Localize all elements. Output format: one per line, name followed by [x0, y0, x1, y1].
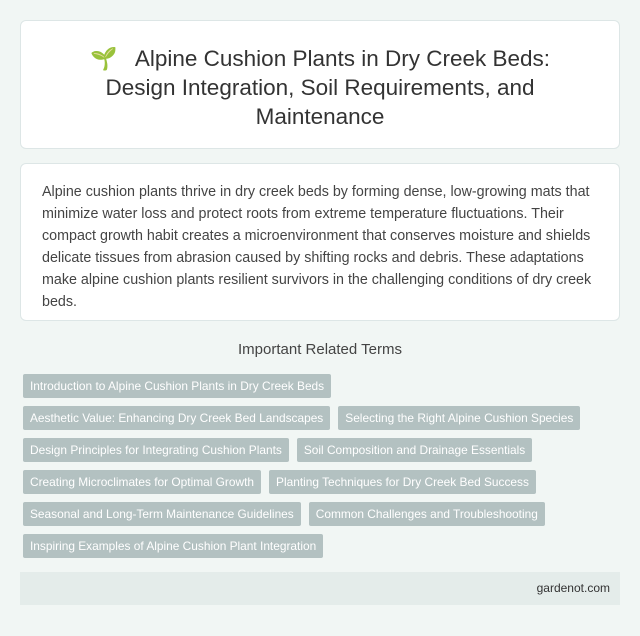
description text: delicate tissues from abrasion caused by shifting rocks and debris. These adaptations — [42, 250, 584, 266]
tags row 2: Selecting the Right Alpine Cushion Species — [345, 411, 573, 425]
related terms heading: Important Related Terms — [238, 341, 402, 358]
title: Design Integration, Soil Requirements, and — [106, 75, 534, 100]
description text: Alpine cushion plants thrive in dry creek beds by forming dense, low-growing mats that — [42, 184, 590, 200]
tags row 6: Inspiring Examples of Alpine Cushion Plant Integration — [30, 539, 316, 553]
title: Maintenance — [256, 104, 384, 129]
header card — [20, 20, 620, 149]
tags row 3: Design Principles for Integrating Cushion Plants — [30, 443, 282, 457]
title — [90, 46, 550, 129]
tags row 5: Seasonal and Long-Term Maintenance Guidelines — [30, 507, 294, 521]
tags row 2 — [23, 406, 580, 430]
tags row 4 — [23, 470, 536, 494]
tags row 5 — [23, 502, 545, 526]
tags row 2: Aesthetic Value: Enhancing Dry Creek Bed Landscapes — [30, 411, 323, 425]
footer — [20, 572, 620, 605]
tags row 1: Introduction to Alpine Cushion Plants in Dry Creek Beds — [30, 379, 324, 393]
description text: make alpine cushion plants resilient survivors in the challenging conditions of dry creek — [42, 272, 591, 288]
tags row 3: Soil Composition and Drainage Essentials — [304, 443, 525, 457]
description text: compact growth habit creates a microenvironment that conserves moisture and shields — [42, 228, 590, 244]
tags row 4: Creating Microclimates for Optimal Growth — [30, 475, 254, 489]
description text: beds. — [42, 294, 77, 310]
tags row 3 — [23, 438, 532, 462]
description text: minimize water loss and protect roots from extreme temperature fluctuations. Their — [42, 206, 564, 222]
tags row 4: Planting Techniques for Dry Creek Bed Success — [276, 475, 529, 489]
description card — [20, 163, 620, 321]
description text — [42, 184, 592, 310]
tags row 5: Common Challenges and Troubleshooting — [316, 507, 538, 521]
footer: gardenot.com — [537, 581, 610, 595]
title: 🌱 Alpine Cushion Plants in Dry Creek Beds: — [90, 46, 550, 71]
